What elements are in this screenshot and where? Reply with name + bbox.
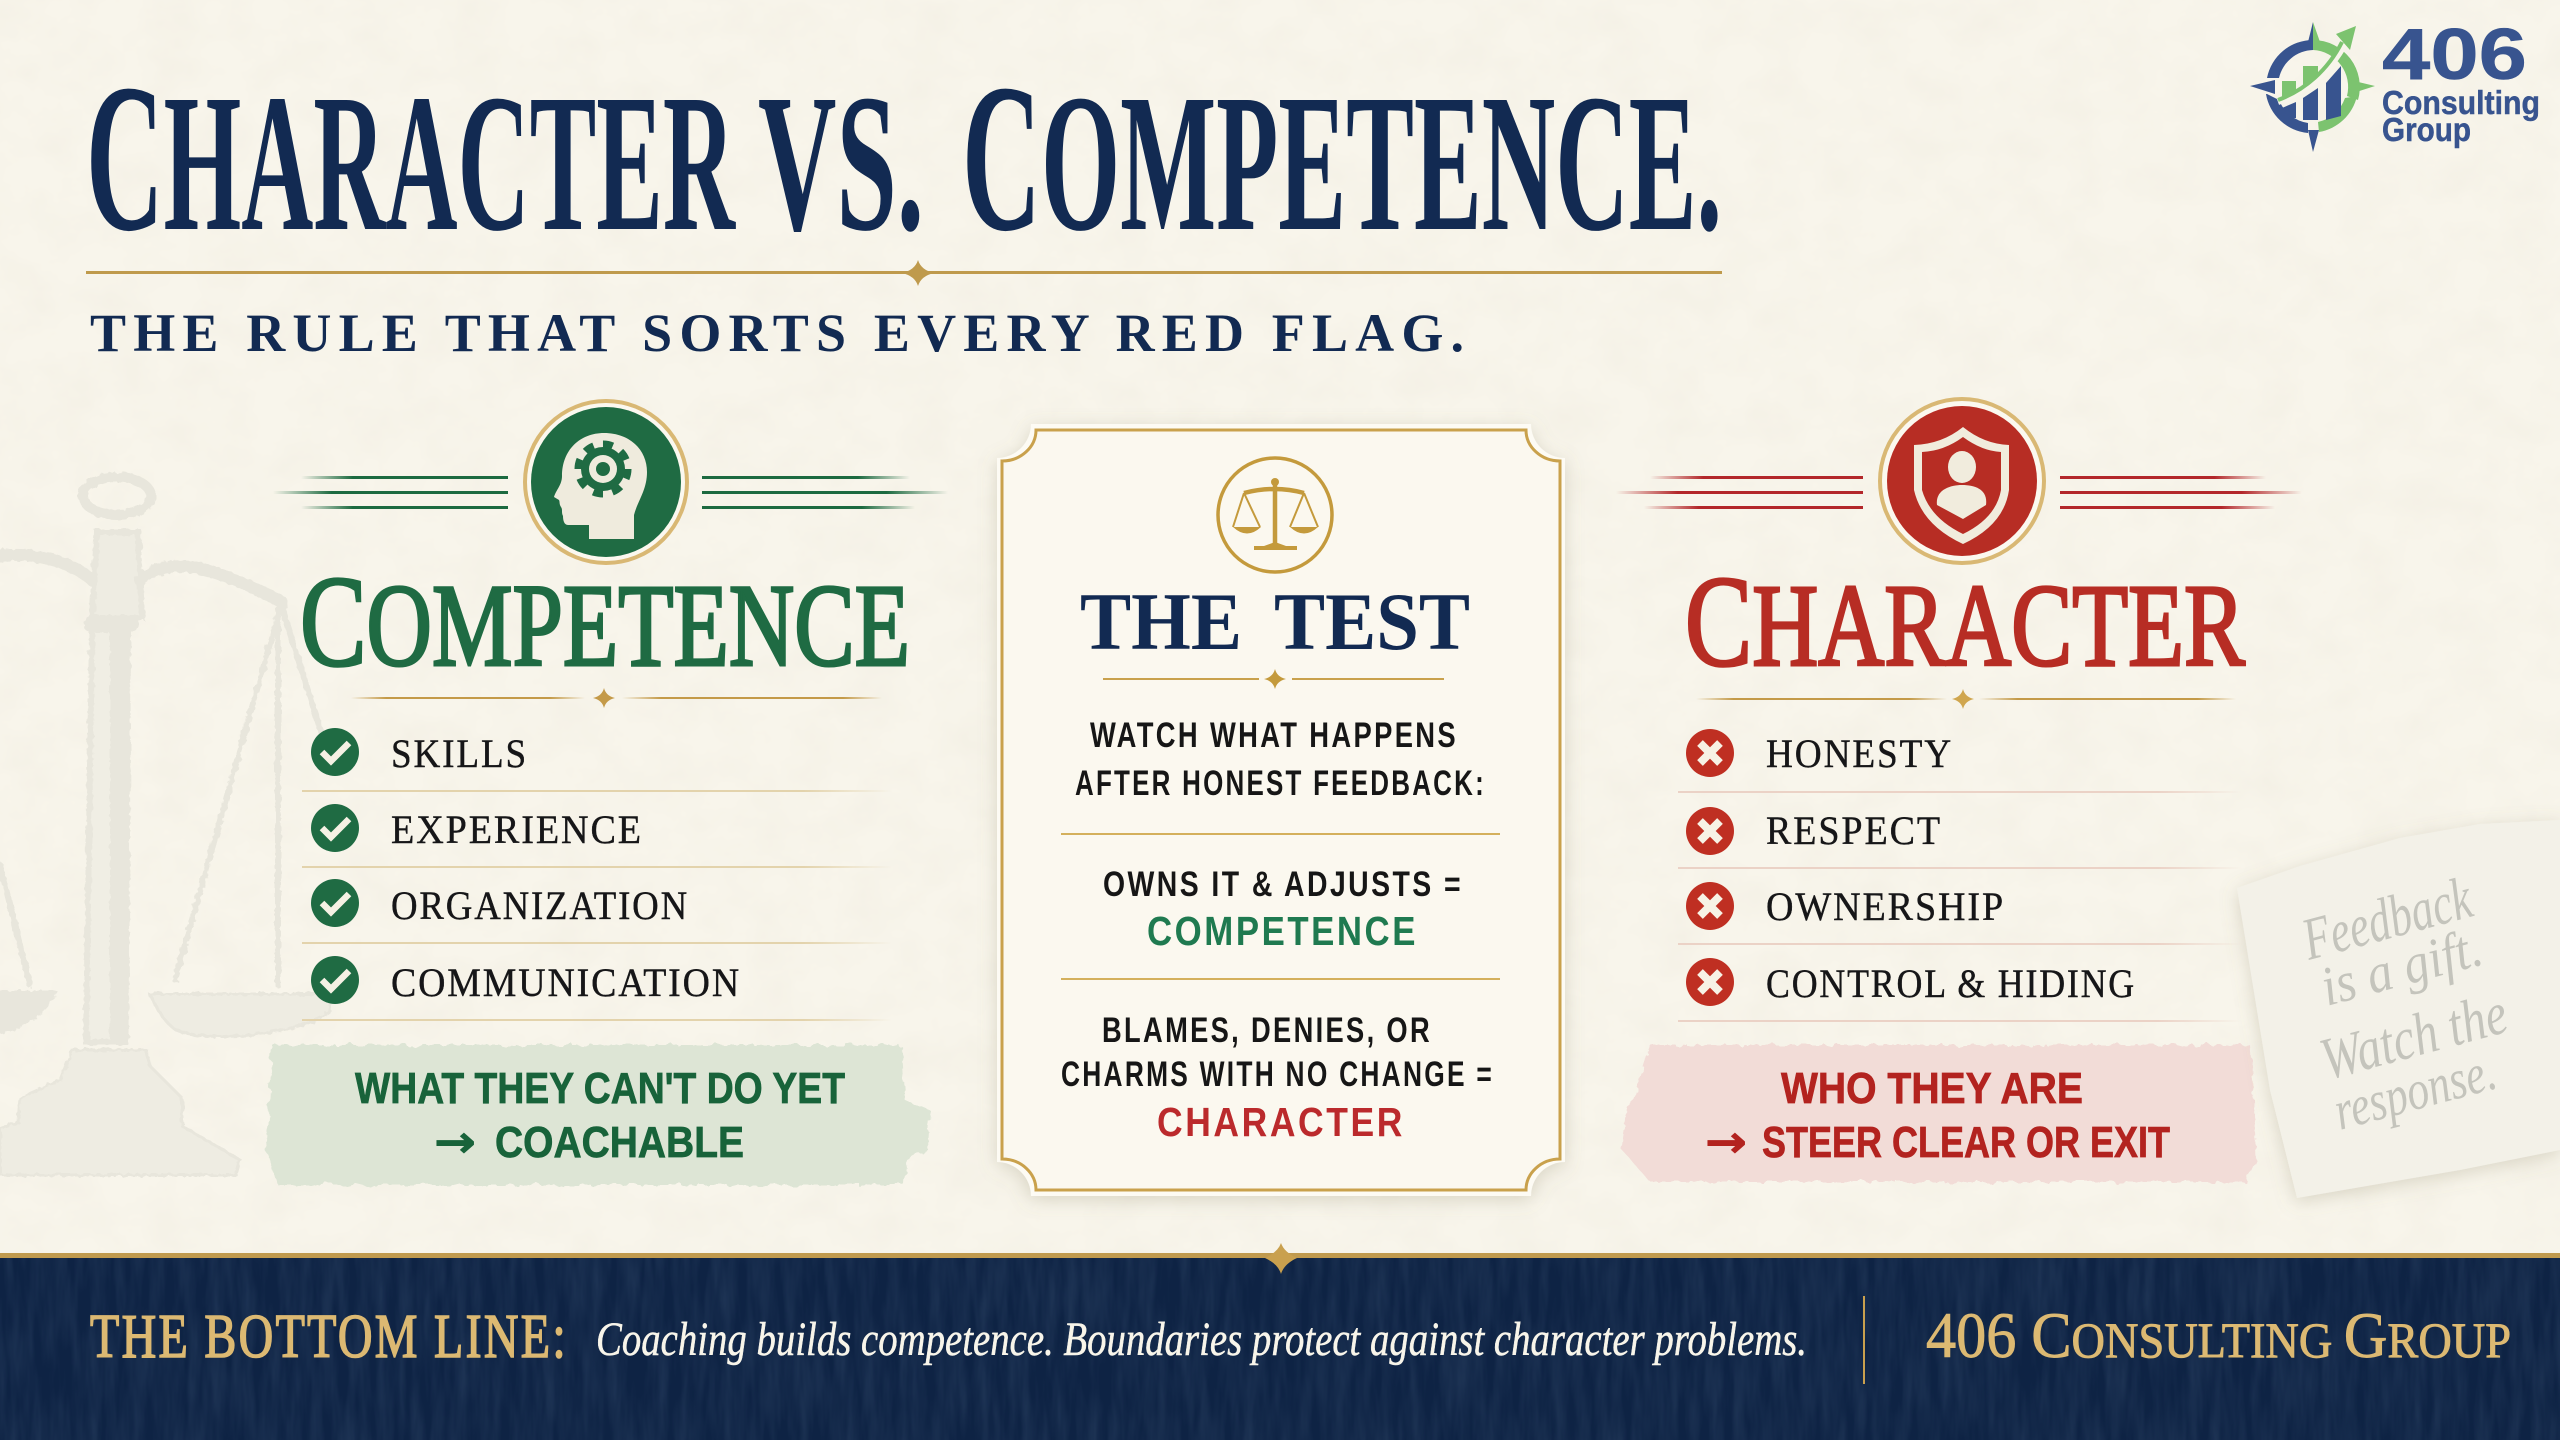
panel: the test: [997, 424, 1565, 1196]
character heading: CHARACTER: [1685, 550, 2245, 694]
logo wordmark: [2382, 15, 2540, 148]
test prompt: [1075, 716, 1486, 803]
list item: honesty: HONESTY: [1766, 731, 1953, 776]
callout: steer clear: →: [1705, 1117, 1747, 1168]
competence divider: [351, 688, 882, 708]
torn note: feedback is a gift: Feedback: [2295, 864, 2479, 973]
bottom brand name: 406 CONSULTING GROUP: [1926, 1300, 2511, 1372]
character divider: [1696, 689, 2236, 709]
test heading: [1080, 576, 1470, 667]
competence heading: COMPETENCE: [300, 550, 910, 694]
watermark: scales of justice: [0, 477, 330, 1175]
competence list: [302, 728, 892, 1021]
list item: communication: COMMUNICATION: [391, 960, 741, 1005]
callout: steer clear: STEER CLEAR OR EXIT: [1762, 1118, 2170, 1167]
logo compass mark: [2250, 22, 2375, 152]
title: CHARACTER: [86, 40, 736, 275]
list item: experience: [302, 804, 892, 868]
callout: coachable: [266, 1045, 930, 1185]
character header lines: [1616, 476, 2302, 509]
icon: head with gear: [525, 401, 687, 563]
title: COMPETENCE.: [962, 40, 1722, 275]
panel: competence: [266, 401, 948, 1185]
test outcome: competence: COMPETENCE: [1147, 908, 1418, 954]
test outcome: character: [1061, 1011, 1494, 1145]
test outcome: competence: [1103, 865, 1463, 954]
callout: steer clear: [1622, 1045, 2256, 1182]
list item: ownership: [1678, 882, 2242, 945]
list item: organization: [302, 879, 892, 944]
icon: balance scale: [1218, 458, 1332, 572]
torn note: feedback is a gift: Watch the: [2313, 980, 2514, 1093]
test heading: THE: [1080, 576, 1242, 667]
subtitle: THE RULE THAT SORTS EVERY RED FLAG.: [90, 303, 1464, 363]
callout: coachable: →: [434, 1117, 476, 1168]
test outcome: competence: OWNS IT & ADJUSTS =: [1103, 865, 1463, 904]
callout: coachable: COACHABLE: [495, 1118, 744, 1167]
test divider: [1103, 669, 1444, 689]
test heading: TEST: [1274, 576, 1470, 667]
list item: respect: RESPECT: [1766, 808, 1942, 853]
character list: [1678, 729, 2242, 1022]
torn note: feedback is a gift: is a gift.: [2314, 916, 2489, 1019]
bottom line message: Coaching builds competence. Boundaries protect against character problems.: [596, 1313, 1807, 1366]
test prompt: WATCH WHAT HAPPENS: [1090, 716, 1458, 755]
list item: communication: [302, 956, 892, 1021]
test outcome: character: CHARACTER: [1157, 1099, 1405, 1145]
title divider: [86, 260, 1722, 286]
logo wordmark: 406: [2382, 15, 2527, 95]
title: VS.: [758, 53, 924, 272]
list item: skills: SKILLS: [391, 731, 528, 776]
test outcome: character: BLAMES, DENIES, OR: [1102, 1011, 1432, 1050]
list item: honesty: [1678, 729, 2242, 793]
gold diamond: [1265, 1243, 1297, 1274]
logo wordmark: Group: [2382, 111, 2471, 148]
list item: ownership: OWNERSHIP: [1766, 884, 2005, 929]
bottom band: [0, 1243, 2560, 1440]
test card frame: [997, 424, 1565, 1196]
list item: skills: [302, 728, 892, 792]
list item: control and hiding: [1678, 958, 2242, 1022]
callout: steer clear: WHO THEY ARE: [1781, 1064, 2083, 1113]
panel: character: [1616, 399, 2302, 1182]
test prompt: AFTER HONEST FEEDBACK:: [1075, 764, 1486, 803]
torn note: feedback is a gift: [2237, 820, 2560, 1198]
competence header lines: [273, 476, 948, 509]
torn note: feedback is a gift: response.: [2327, 1040, 2503, 1143]
callout: coachable: WHAT THEY CAN'T DO YET: [355, 1064, 845, 1113]
bottom line label: THE BOTTOM LINE:: [90, 1303, 568, 1371]
list item: experience: EXPERIENCE: [391, 807, 643, 852]
list item: control and hiding: CONTROL & HIDING: [1766, 961, 2136, 1006]
list item: respect: [1678, 807, 2242, 869]
list item: organization: ORGANIZATION: [391, 883, 689, 928]
icon: shield with person: [1880, 399, 2044, 563]
logo wordmark: Consulting: [2382, 84, 2540, 121]
logo: 406 Consulting Group: [2250, 15, 2540, 152]
test outcome: character: CHARMS WITH NO CHANGE =: [1061, 1055, 1494, 1094]
